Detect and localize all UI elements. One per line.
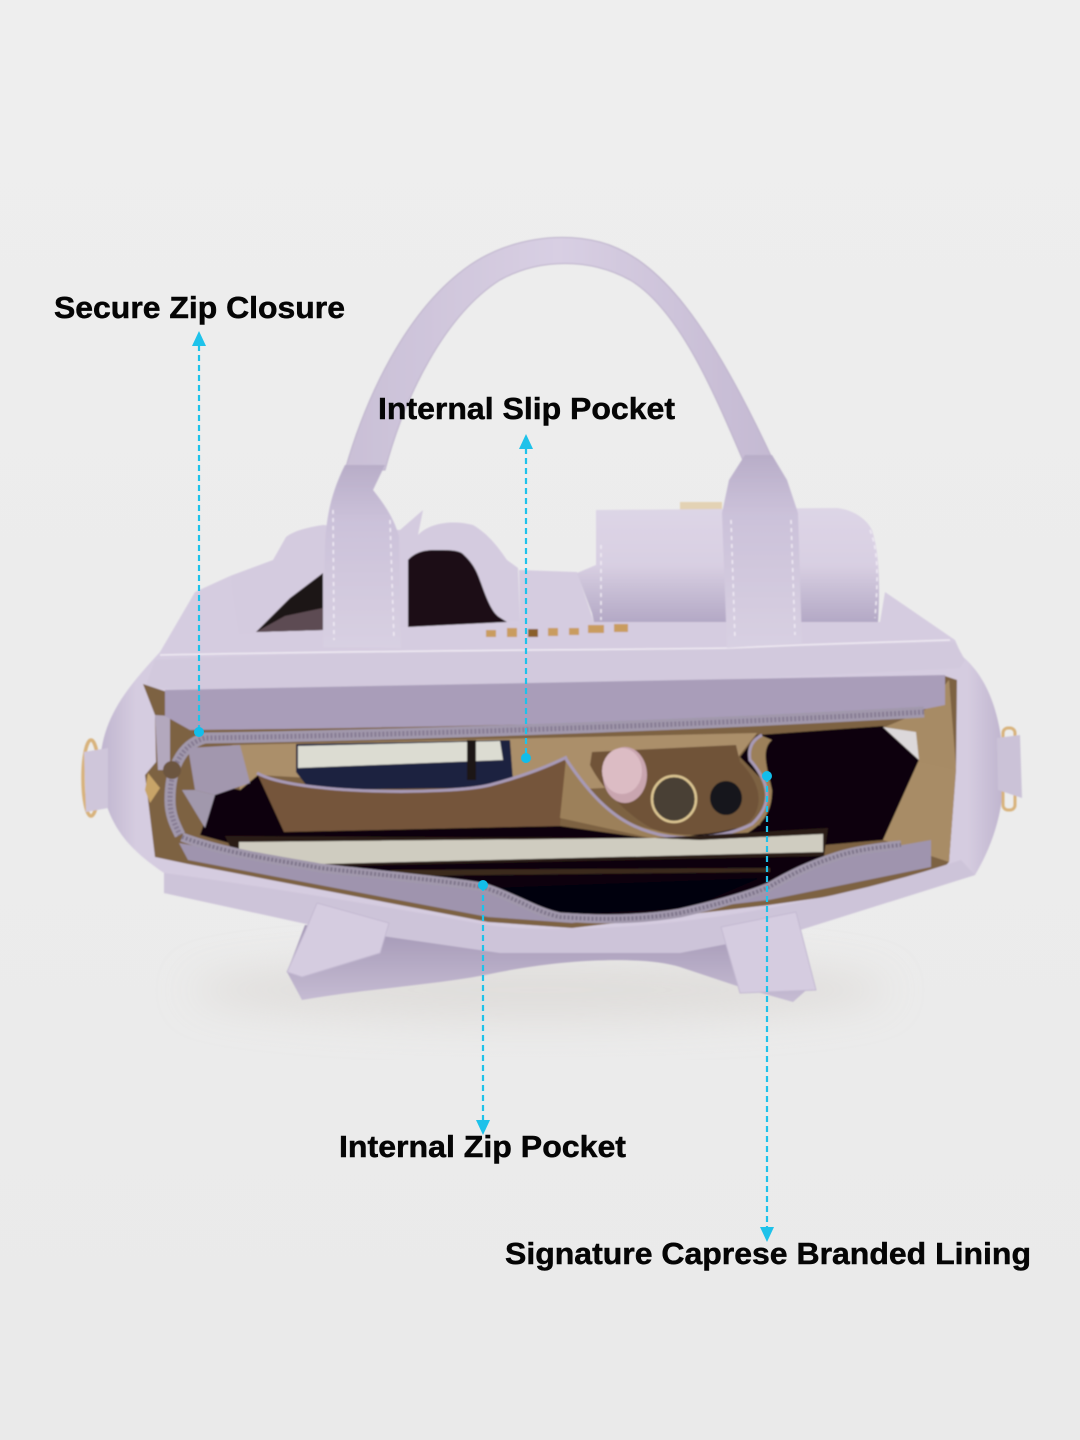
top handle [345, 237, 772, 470]
left pocket [257, 757, 567, 832]
gold compact [652, 776, 696, 822]
right strap tab with ring [997, 728, 1022, 810]
right handle strap [722, 455, 802, 648]
black cap [710, 781, 742, 815]
front left strap tab [287, 903, 389, 977]
handbag illustration [83, 237, 1022, 1020]
label: internal zip pocket: Internal Zip Pocket [339, 1129, 626, 1164]
right lining [883, 680, 956, 862]
upper zipper [170, 712, 924, 835]
black interior [200, 726, 919, 917]
right roll pocket [577, 502, 879, 622]
front rim highlight [164, 860, 975, 953]
label: internal slip pocket: Internal Slip Pocket [378, 391, 675, 426]
arrow: signature branded lining [760, 771, 774, 1242]
label: secure zip closure: Secure Zip Closure [54, 290, 345, 325]
callout: internal slip pocket [378, 391, 675, 763]
lower zipper [182, 837, 901, 919]
left handle strap [323, 465, 401, 648]
back inner flap [165, 675, 945, 730]
bottom back panel [287, 920, 812, 1002]
callout: internal zip pocket [339, 880, 626, 1164]
ground shadow [190, 960, 890, 1020]
front inner flap [179, 840, 931, 923]
right pocket interior [590, 745, 759, 835]
callout: secure zip closure [54, 290, 345, 737]
logo studs [486, 624, 628, 637]
zip pull [145, 745, 250, 828]
label: signature branded lining: Signature Caprese Branded Lining [505, 1236, 1031, 1271]
large book [225, 828, 828, 868]
right pocket front [560, 735, 772, 840]
arrow: internal slip pocket [519, 434, 533, 763]
interior cavity [143, 676, 957, 928]
outer bag body [100, 570, 1004, 953]
arrow: secure zip closure [192, 331, 206, 737]
back tan lining [232, 733, 757, 790]
arrow: internal zip pocket [476, 880, 490, 1135]
left flap pocket [230, 510, 520, 634]
pink cosmetic [603, 747, 647, 803]
navy book [296, 740, 513, 790]
upper rim band [145, 642, 965, 689]
phone [490, 878, 760, 915]
left side lining wall [155, 715, 170, 770]
left strap tab with ring [83, 740, 108, 816]
front right strap tab [721, 912, 816, 993]
callout: signature branded lining [505, 771, 1031, 1271]
